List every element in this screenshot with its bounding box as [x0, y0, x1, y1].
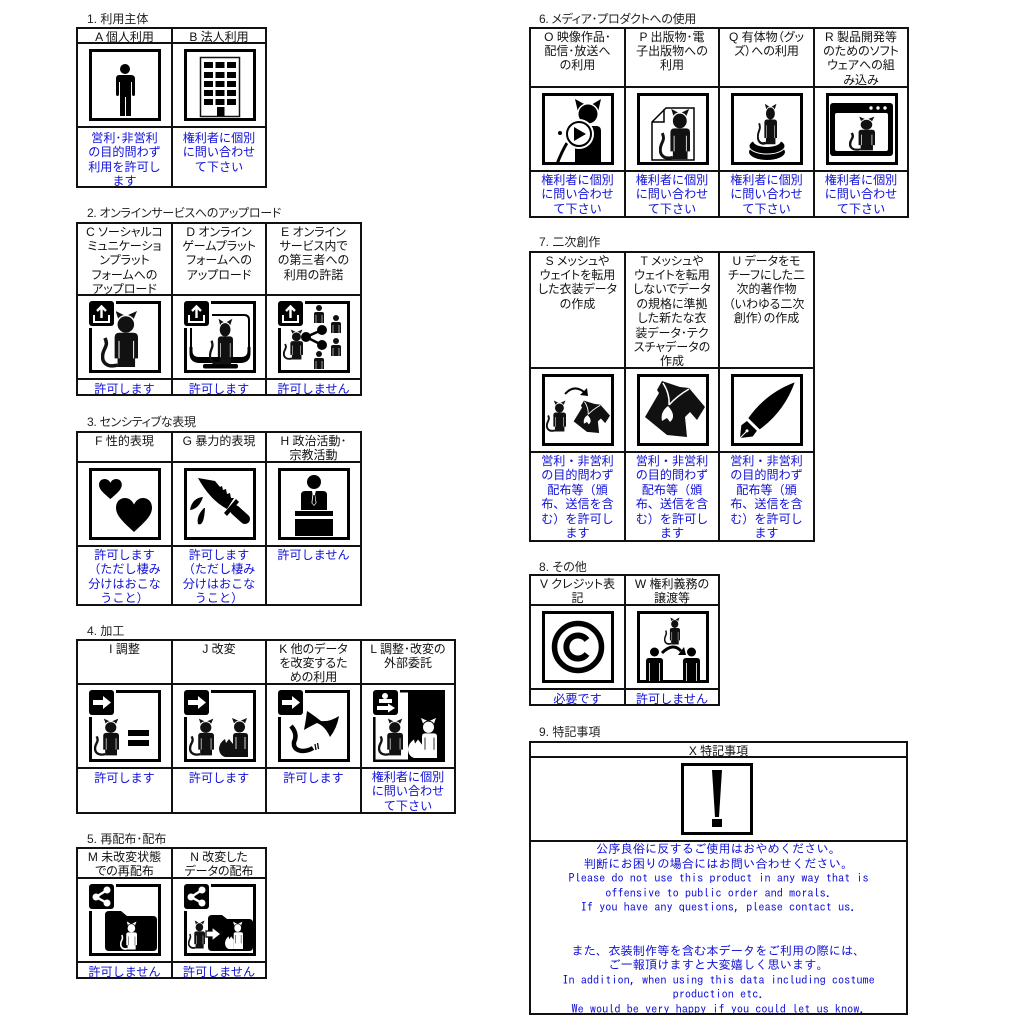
item U: 配布等（頒 [736, 483, 797, 497]
item L: L 調整･改変の [370, 642, 446, 656]
item V: V クレジット表 [540, 576, 615, 590]
icon: speaker at podium [278, 468, 350, 540]
item U: ます [754, 526, 779, 540]
item W: W 権利義務の [635, 576, 709, 590]
table: 1 利用主体 [76, 27, 267, 188]
table: 5 再配布・配布 [76, 847, 267, 979]
item W: 許可しません [636, 692, 708, 706]
item A 個人利用 [76, 27, 171, 188]
item M: 許可しません [88, 965, 161, 979]
icon: exclamation [681, 763, 753, 835]
item T [624, 251, 720, 542]
item D: アップロード [187, 268, 251, 282]
item I: I 調整 [109, 642, 140, 656]
item V [529, 574, 626, 706]
item T: しないでデータ [633, 282, 711, 296]
item R: のためのソフト [823, 44, 899, 58]
table: 3 センシティブな表現 [76, 431, 362, 606]
item S: の目的問わず [541, 468, 614, 482]
item S: した衣装データ [538, 282, 617, 296]
item P: 権利者に個別 [636, 173, 708, 187]
item A 個人利用: 利用を許可し [88, 160, 161, 174]
item L: 外部委託 [384, 656, 432, 670]
item J: J 改変 [202, 642, 236, 656]
item I [76, 639, 171, 814]
item G: （ただし棲み [183, 562, 255, 576]
item O: 権利者に個別 [541, 173, 614, 187]
item J: 許可します [189, 771, 249, 785]
item Q: に問い合わせ [730, 187, 803, 201]
item O: に問い合わせ [541, 187, 614, 201]
item C: フォームへの [92, 268, 157, 282]
item Q: 権利者に個別 [730, 173, 803, 187]
item B 法人利用: に問い合わせ [183, 145, 255, 159]
item J [173, 639, 265, 814]
item O: て下さい [553, 202, 602, 216]
item U: 次的著作物 [736, 282, 796, 296]
item L: て下さい [384, 799, 432, 813]
item S: 配布等（頒 [547, 483, 608, 497]
item O: 配信･放送へ [544, 44, 611, 58]
item T: した新たな衣 [638, 311, 706, 325]
icon: publication [637, 93, 709, 165]
item A 個人利用: ます [112, 174, 137, 188]
item T: 布、送信を含 [636, 497, 708, 511]
heading: 3 センシティブな表現: 3. センシティブな表現 [87, 415, 196, 429]
item R: み込み [843, 73, 879, 87]
item A 個人利用: A 個人利用 [95, 30, 154, 44]
item C: C ソーシャルコ [86, 224, 163, 238]
item B 法人利用: B 法人利用 [189, 30, 249, 44]
item V: 記 [571, 591, 584, 605]
item S: 布、送信を含 [541, 497, 614, 511]
item G: 許可します [189, 548, 249, 562]
item C: 許可します [94, 382, 155, 396]
item P: 利用 [660, 58, 684, 72]
item G: 分けはおこな [183, 577, 255, 591]
item T: T メッシュや [641, 254, 703, 268]
item N [173, 847, 267, 979]
item T: ウェイトを転用 [634, 268, 710, 282]
item N: データの配布 [184, 864, 254, 878]
item O [529, 27, 624, 218]
item E: サービス内で [279, 239, 348, 253]
item H: 宗教活動 [289, 448, 338, 462]
item F: 分けはおこな [88, 577, 161, 591]
item X: X 特記事項 [689, 744, 748, 758]
item G [173, 431, 265, 606]
table: 7 二次創作 [529, 251, 815, 542]
item U: む）を許可し [730, 512, 803, 526]
table: 8 その他 [529, 574, 720, 706]
item Q: ズ）への利用 [734, 44, 799, 58]
item U: U データをモ [732, 254, 801, 268]
item T: 装データ･テク [635, 326, 709, 340]
icon: software window [826, 93, 898, 165]
item Q: て下さい [742, 202, 791, 216]
item U [718, 251, 815, 542]
item E: 利用の許諾 [284, 268, 343, 282]
item N: 許可しません [183, 965, 255, 979]
icon: building [184, 49, 256, 121]
icon: outsourced modification [373, 690, 445, 762]
item F: うこと） [100, 591, 149, 605]
item R: R 製品開発等 [825, 30, 897, 44]
item K: めの利用 [290, 670, 337, 684]
icon: transfer of rights [637, 611, 709, 683]
item X: また、衣装制作等を含む本データをご利用の際には、 [572, 945, 866, 957]
item T: スチャデータの [634, 340, 710, 354]
icon: upload cat [89, 301, 161, 373]
item R: に問い合わせ [825, 187, 897, 201]
item D: 許可します [189, 382, 249, 396]
item B 法人利用 [173, 27, 267, 188]
item S: ます [565, 526, 590, 540]
item P: P 出版物･電 [639, 30, 705, 44]
table: 6 メディア・プロダクト [529, 27, 909, 218]
item F: F 性的表現 [95, 434, 154, 448]
item S [529, 251, 626, 542]
item X: If you have any questions, please contact us. [581, 901, 856, 913]
icon: video play [542, 93, 614, 165]
item S: ウェイトを転用 [540, 268, 615, 282]
item S: 営利・非営利 [541, 454, 614, 468]
item L: 権利者に個別 [372, 770, 444, 784]
item Q: Q 有体物（グッ [729, 30, 804, 44]
icon: copyright [542, 611, 614, 683]
item K: 許可します [283, 771, 344, 785]
icon: fountain pen [731, 374, 803, 446]
item D: ゲームプラット [182, 239, 256, 253]
item X: 公序良俗に反するご使用はおやめください。 [596, 843, 841, 855]
icon: folder share [89, 884, 161, 956]
item A 個人利用: 営利･非営利 [91, 131, 158, 145]
item W: 譲渡等 [654, 591, 690, 605]
item P [626, 27, 718, 218]
item T: 営利・非営利 [636, 454, 708, 468]
item R: て下さい [837, 202, 885, 216]
heading: 7 二次創作: 7. 二次創作 [539, 235, 600, 249]
item H: H 政治活動･ [280, 434, 346, 448]
item H [267, 431, 362, 606]
table: 4 加工 [76, 639, 456, 814]
item E: の第三者への [278, 253, 349, 267]
item K: K 他のデータ [279, 642, 348, 656]
item D: フォームへの [186, 253, 252, 267]
icon: cat equals [89, 690, 161, 762]
item X: offensive to public order and morals. [605, 887, 832, 899]
icon: ears and tail parts [278, 690, 350, 762]
item E: E オンライン [281, 224, 346, 238]
item L: に問い合わせ [372, 784, 444, 798]
item D: D オンライン [186, 224, 252, 238]
item T: 作成 [660, 354, 684, 368]
item F: 許可します [94, 548, 155, 562]
heading: 5 再配布・配布: 5. 再配布･配布 [87, 832, 166, 846]
item R: ウェアへの組 [827, 58, 895, 72]
item M [76, 847, 171, 979]
item P: に問い合わせ [636, 187, 708, 201]
item S: S メッシュや [546, 254, 609, 268]
item G: G 暴力的表現 [183, 434, 255, 448]
item C: ミュニケーショ [88, 239, 161, 253]
heading: 9 特記事項: 9. 特記事項 [539, 725, 600, 739]
item X: Please do not use this product in any way that is [568, 872, 869, 884]
item T: ます [660, 526, 684, 540]
item F: （ただし棲み [88, 562, 161, 576]
item U: チーフにした二 [728, 268, 805, 282]
item S: の作成 [560, 297, 595, 311]
item X [529, 741, 908, 1015]
item E: 許可しません [277, 382, 350, 396]
item U: 創作）の作成 [734, 311, 799, 325]
icon: figure on pedestal [731, 93, 803, 165]
item K: を改変するた [279, 656, 348, 670]
table: 9 特記事項 [529, 741, 908, 1015]
item X: ご一報頂けますと大変嬉しく思います。 [608, 959, 829, 971]
item X: production etc. [673, 988, 764, 1000]
item A 個人利用: の目的問わず [88, 145, 161, 159]
item S: む）を許可し [541, 512, 614, 526]
item P: 子出版物への [636, 44, 708, 58]
item R: 権利者に個別 [825, 173, 897, 187]
item M: での再配布 [95, 864, 154, 878]
item Q [720, 27, 813, 218]
item V: 必要です [553, 692, 602, 706]
item E [267, 222, 362, 396]
icon: cat to costume [542, 374, 614, 446]
item C: アップロード [92, 282, 157, 296]
item G: うこと） [195, 591, 243, 605]
item N: N 改変した [190, 850, 248, 864]
item M: M 未改変状態 [88, 850, 161, 864]
item B 法人利用: て下さい [195, 160, 243, 174]
item I: 許可します [94, 771, 155, 785]
item F [76, 431, 171, 606]
item T: 配布等（頒 [642, 483, 702, 497]
item T: の目的問わず [636, 468, 708, 482]
item T: む）を許可し [636, 512, 708, 526]
icon: hearts [89, 468, 161, 540]
icon: share to third parties [278, 301, 350, 373]
item U: 営利・非営利 [730, 454, 803, 468]
item U: の目的問わず [730, 468, 803, 482]
item B 法人利用: 権利者に個別 [183, 131, 255, 145]
heading: 4 加工: 4. 加工 [87, 624, 124, 638]
item C [76, 222, 171, 396]
item C: ンプラット [99, 253, 150, 267]
table: 2 オンラインサービス [76, 222, 362, 396]
item X: In addition, when using this data including costume [562, 974, 875, 986]
item T: の規格に準拠 [636, 297, 708, 311]
item W [624, 574, 720, 706]
heading: 6 メディア・プロダクトへの使用: 6. メディア･プロダクトへの使用 [539, 12, 696, 26]
heading: 8 その他: 8. その他 [539, 560, 587, 574]
icon: person [89, 49, 161, 121]
icon: modified data share [184, 884, 256, 956]
item H: 許可しません [277, 548, 350, 562]
item K [267, 639, 360, 814]
item D [173, 222, 265, 396]
item O: O 映像作品･ [544, 30, 611, 44]
heading: 1 利用主体: 1. 利用主体 [87, 12, 148, 26]
item U: （いわゆる二次 [729, 297, 804, 311]
item O: の利用 [560, 58, 595, 72]
icon: knife with drops [184, 468, 256, 540]
heading: 2 オンラインサービスへのアップロード: 2. オンラインサービスへのアップロード [87, 206, 281, 220]
icon: costume [637, 374, 709, 446]
item L [362, 639, 456, 814]
item X: 判断にお困りの場合にはお問い合わせください。 [584, 858, 853, 870]
item R [813, 27, 909, 218]
item P: て下さい [648, 202, 696, 216]
icon: cat to modified cat [184, 690, 256, 762]
icon: game platform monitor [184, 301, 256, 373]
item U: 布、送信を含 [730, 497, 803, 511]
item X: We would be very happy if you could let us know. [572, 1003, 866, 1015]
